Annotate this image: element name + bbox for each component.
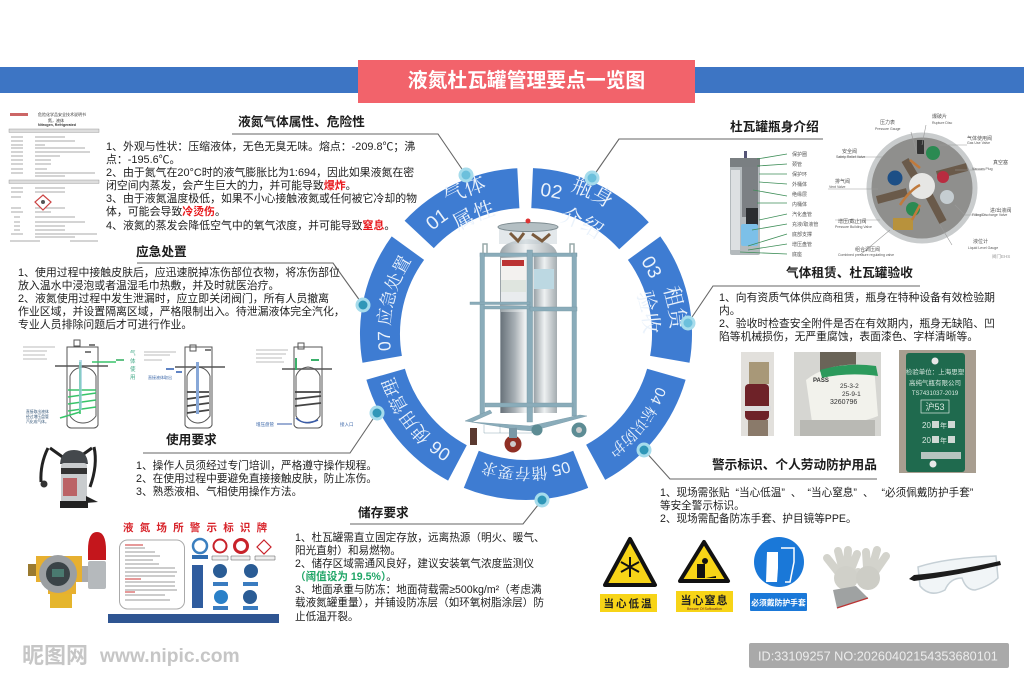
warning sign board: 液氮场所警示标识牌: [123, 521, 273, 534]
dewar cutaway diagram: 汽化盘管: [792, 211, 812, 218]
dewar cutaway diagram: 绝缘层: [792, 191, 807, 198]
label 02: 介绍: [560, 208, 604, 239]
dewar valve top view diagram: Vacuum Plug: [972, 167, 993, 171]
tank flow diagram 2: [144, 345, 225, 428]
label 03: 租赁: [663, 286, 688, 328]
safety data sheet: 危险化学品安全技术说明书: [38, 111, 86, 117]
watermark: id box: [749, 643, 1009, 668]
label 02: 02: [541, 183, 562, 199]
text: gas properties: 3、由于液氮温度极低，如果不小心接触液氮或任何被它冷却的物: [106, 193, 417, 205]
safety goggles: [909, 556, 1001, 593]
segment 06: [366, 369, 467, 481]
text: emergency response: 2、液氮使用过程中发生泄漏时，应立即关闭阀门，所有人员撤离: [18, 293, 329, 305]
segment 04: [586, 369, 686, 480]
title: 液氮杜瓦罐管理要点一览图: [408, 70, 645, 92]
text: warning signs and PPE: 1、现场需张贴 “当心低温” 、 “当心窒息” 、 “必须佩戴防护手套”: [660, 487, 973, 499]
text: storage requirements: 阳光直射）和易燃物。: [295, 545, 401, 557]
photo: green inspection plate: 高纯气瓶有限公司: [909, 378, 961, 387]
sign: caution suffocation: 当心窒息: [680, 593, 728, 607]
heading: emergency response: 应急处置: [136, 245, 187, 259]
text: gas properties: [106, 140, 417, 232]
dewar valve top view diagram: 阀门EHS: [992, 253, 1010, 260]
text: emergency response: 作业区域，并设置隔离区域，严格限制出入。待泄漏液体完全汽化，: [18, 306, 345, 318]
tank flow diagram 1: 直接取出液体: [26, 409, 49, 414]
gas alarm detector: [28, 532, 106, 608]
text: emergency response: [18, 266, 345, 331]
text: storage requirements: 1、杜瓦罐需直立固定存放，远离热源（明火、暖气、: [295, 532, 545, 544]
watermark: id box: ID:33109257 NO:20260402154353680101: [758, 650, 998, 664]
text: gas properties: 2、由于氮气在20°C时的液气膨胀比为1:694，因此如果液氮在密: [106, 167, 414, 179]
label 01: 属性: [452, 200, 496, 232]
text: emergency response: 放入温水中浸泡或者温湿毛巾热敷，并及时就医治疗。: [18, 280, 279, 292]
dewar valve top view diagram: Filling/Discharge Valve: [972, 213, 1007, 217]
dewar cutaway diagram: 外桶体: [792, 181, 807, 188]
photo: green inspection plate: 沪53: [925, 401, 945, 412]
dewar cutaway diagram: 保护环: [792, 171, 807, 178]
text: usage requirements: [136, 460, 377, 498]
watermark: site name: 昵图网: [22, 643, 88, 668]
tank flow diagram 1: 使: [130, 365, 136, 373]
text: usage requirements: 1、操作人员须经过专门培训，严格遵守操作规程。: [136, 460, 377, 472]
text: storage requirements: 2、储存区域需通风良好，建议安装氧气浓度监测仪: [295, 558, 534, 570]
label 03: [637, 256, 688, 334]
dewar cutaway diagram: 底座: [792, 251, 802, 258]
label 05: 05 储存要求: [482, 462, 570, 482]
segment 07: [360, 236, 424, 363]
dewar valve top view diagram: 增压(截止)阀: [838, 218, 866, 225]
text: usage requirements: 3、熟悉液相、气相使用操作方法。: [136, 486, 302, 498]
heading: warning signs and PPE: 警示标识、个人劳动防护用品: [712, 458, 877, 472]
text: emergency response: 1、使用过程中接触皮肤后，应迅速脱掉冻伤部位衣物，将冻伤部位: [18, 267, 340, 279]
dewar cutaway diagram: 充液/取液管: [792, 221, 818, 228]
label 06: 06 使用管理: [380, 376, 450, 460]
text: warning signs and PPE: 2、现场需配备防冻手套、护目镜等PPE。: [660, 513, 857, 525]
heading: rental and acceptance: 气体租赁、杜瓦罐验收: [786, 266, 913, 280]
text: storage requirements: （阈值设为 19.5%）。: [295, 571, 397, 583]
watermark: site name: www.nipic.com: [99, 646, 240, 667]
text: gas properties: 4、液氮的蒸发会降低空气中的氧气浓度，并可能导致窒息。: [106, 220, 395, 232]
text: gas properties: 1、外观与性状：压缩液体，无色无臭无味。熔点：-209.8℃；沸: [106, 141, 415, 153]
photo: PASS tag on fitting: [794, 352, 881, 436]
heading: usage requirements: 使用要求: [166, 433, 217, 447]
leader lines: [137, 134, 920, 524]
segment 02: [531, 168, 649, 249]
dewar valve top view diagram: 液位计: [973, 238, 988, 245]
text: usage requirements: 2、在使用过程中要避免直接接触皮肤，防止冻伤。: [136, 473, 377, 485]
tank flow diagram 1: [23, 340, 136, 428]
connector dots: [356, 168, 696, 508]
text: rental and acceptance: [719, 292, 995, 343]
dewar valve top view diagram: 排气阀: [835, 178, 850, 185]
text: storage requirements: [295, 532, 545, 623]
text: emergency response: 专业人员排除问题后才可进行作业。: [18, 319, 192, 331]
sign: caution low temperature: [600, 539, 657, 612]
heading: storage requirements: 储存要求: [358, 506, 409, 520]
text: warning signs and PPE: 等安全警示标识。: [660, 500, 745, 512]
sign: must wear protective gloves: [750, 537, 807, 611]
label 01: [426, 174, 496, 232]
text: rental and acceptance: 1、向有资质气体供应商租赁，瓶身在特种设备有效检验期: [719, 292, 995, 304]
dewar valve top view diagram: 进/出液阀: [990, 207, 1011, 214]
text: rental and acceptance: 2、验收时检查安全附件是否在有效期内，瓶身无缺陷、凹: [719, 318, 995, 330]
tank flow diagram 1: 汽化成气体。: [26, 419, 49, 424]
dewar cutaway diagram: 底部支撑: [792, 231, 812, 238]
tank flow diagram 1: 用: [130, 374, 136, 381]
dewar cutaway diagram: [730, 151, 818, 258]
photo: green inspection plate: [899, 350, 976, 473]
heading: gas properties: 液氮气体属性、危险性: [238, 115, 365, 129]
title: [358, 60, 695, 103]
segment 05: [464, 451, 588, 500]
text: storage requirements: 3、地面承重与防冻：地面荷载需≥500kg/m²（考虑满: [295, 584, 542, 596]
dewar cutaway diagram: 保护圈: [792, 151, 807, 158]
safety data sheet: [9, 111, 99, 241]
segment 01: [405, 168, 519, 248]
photo: PASS tag on fitting: 25-9-1: [842, 391, 861, 398]
tank flow diagram 3: 增压盘管: [256, 421, 274, 428]
dewar valve top view diagram: 爆破片: [932, 113, 947, 120]
tank flow diagram 3: [256, 343, 354, 428]
label 02: 瓶身: [570, 175, 612, 206]
dewar cutaway diagram: 内桶体: [792, 201, 807, 208]
safety data sheet: Nitrogen, Refrigerated: [38, 123, 76, 127]
text: gas properties: 闭空间内蒸发，会产生巨大的力，并可能导致爆炸。: [106, 180, 357, 192]
segment 03: [628, 236, 692, 363]
photo: PASS tag on fitting: 25-3-2: [840, 383, 859, 390]
label 01: 01: [426, 210, 448, 229]
breathing apparatus: [40, 447, 98, 508]
text: rental and acceptance: 内。: [719, 305, 741, 317]
label 02: [541, 175, 612, 239]
dewar valve top view diagram: Pressure Gauge: [875, 127, 901, 131]
sign: caution suffocation: [676, 542, 733, 612]
text: gas properties: 体，可能会导致冷烫伤。: [106, 206, 226, 218]
warning sign board: [108, 521, 279, 623]
dewar valve top view diagram: Safety Relief Valve: [836, 155, 865, 159]
text: rental and acceptance: 陷等机械损伤，无严重腐蚀，表面漆色、字样清晰等。: [719, 331, 978, 343]
ring of seven sections: [360, 168, 692, 500]
dewar valve top view diagram: 真空塞: [993, 159, 1008, 166]
label 03: 03: [642, 256, 661, 278]
central dewar tank photo: [465, 218, 587, 452]
header band: [0, 67, 1024, 93]
photo: green inspection plate: TS7431037-2019: [912, 391, 959, 397]
watermark: site name: [22, 643, 240, 668]
dewar valve top view diagram: [828, 113, 1011, 260]
dewar valve top view diagram: Pressure Building Valve: [835, 225, 872, 229]
label 01: 气体: [446, 174, 486, 198]
text: gas properties: 点：-195.6℃。: [106, 154, 180, 166]
photo: PASS tag on fitting: PASS: [813, 378, 829, 384]
tank flow diagram 1: 经过增压盘管: [26, 414, 49, 419]
sign: must wear protective gloves: 必须戴防护手套: [751, 598, 806, 608]
tank flow diagram 2: 直接液体取出: [148, 374, 172, 380]
photo: valve with inspection tag: [741, 352, 774, 436]
text: storage requirements: 止低温开裂。: [295, 611, 359, 623]
safety data sheet: 氮，液体: [48, 117, 64, 123]
dewar valve top view diagram: Vent Valve: [829, 185, 846, 189]
dewar valve top view diagram: Rupture Disc: [932, 121, 952, 125]
dewar valve top view diagram: Combined pressure regulating valve: [838, 253, 894, 257]
dewar valve top view diagram: 气体使用阀: [967, 135, 992, 142]
sign: caution low temperature: 当心低温: [604, 597, 654, 610]
photo: green inspection plate: 年: [940, 436, 947, 445]
tank flow diagram 3: 接入口: [340, 421, 354, 428]
dewar valve top view diagram: Gas Use Valve: [967, 141, 990, 145]
text: warning signs and PPE: [660, 486, 973, 525]
heading: dewar body: 杜瓦罐瓶身介绍: [730, 120, 819, 134]
dewar cutaway diagram: 颈管: [792, 161, 802, 168]
photo: green inspection plate: 20: [922, 421, 931, 430]
dewar valve top view diagram: 组合调压阀: [855, 246, 880, 253]
text: storage requirements: 载液氮罐重量），并铺设防冻层（如环氧树脂涂层）防: [295, 597, 544, 609]
photo: green inspection plate: 年: [940, 421, 947, 430]
protective gloves: [827, 550, 886, 608]
dewar valve top view diagram: 压力表: [880, 119, 895, 126]
label 07: 07 应急处置: [376, 255, 412, 350]
label 03: 验收: [637, 290, 662, 334]
photo: green inspection plate: 20: [922, 436, 931, 445]
dewar valve top view diagram: Liquid Level Gauge: [968, 246, 998, 250]
ring labels: [376, 174, 688, 482]
tank flow diagram 1: 气: [130, 349, 136, 357]
photo: green inspection plate: 检验单位：上海思塑: [906, 367, 965, 376]
label 04: 04 标识防护: [612, 388, 666, 456]
dewar cutaway diagram: 增压盘管: [792, 241, 812, 248]
tank flow diagram 1: 体: [130, 357, 136, 365]
dewar valve top view diagram: 安全阀: [842, 148, 857, 155]
photo: PASS tag on fitting: 3260796: [830, 399, 857, 406]
sign: caution suffocation: Beware Of Suffocation: [687, 607, 722, 611]
